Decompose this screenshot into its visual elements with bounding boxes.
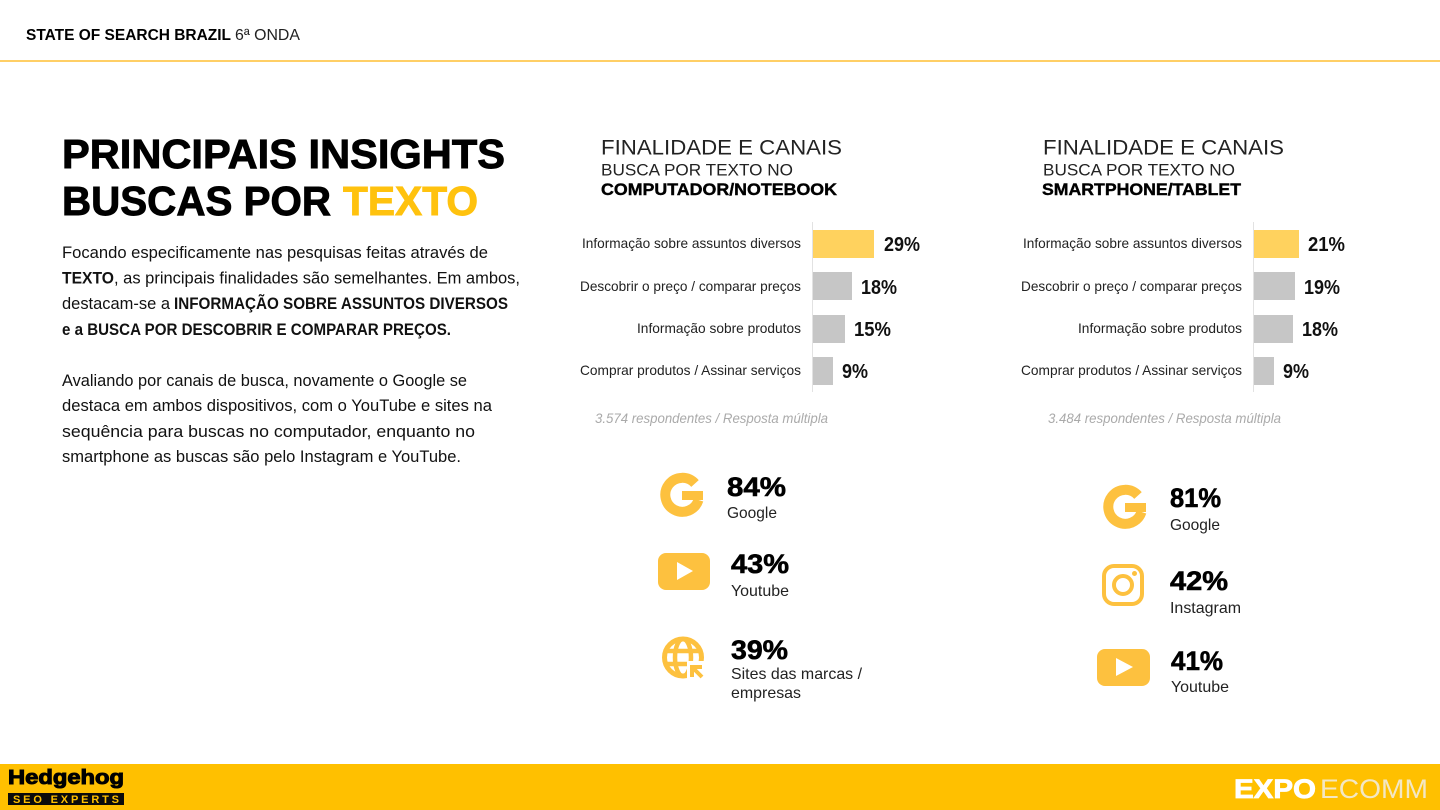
stat: instagram 42%	[1170, 566, 1241, 617]
title	[62, 131, 505, 224]
stat: google 81%: 81%	[1170, 483, 1221, 513]
header bar: STATE OF SEARCH BRAZIL	[26, 27, 231, 44]
title: PRINCIPAIS INSIGHTS	[62, 131, 505, 177]
bar chart: smartphone/tablet: Informação sobre produtos	[1078, 320, 1242, 336]
bar chart: smartphone/tablet: 19%	[1304, 277, 1340, 299]
text block: second paragraph: sequência para buscas no computador, enquanto no	[62, 423, 475, 441]
logo: hedgehog seo experts: SEO EXPERTS	[13, 794, 119, 806]
stat: youtube 41%: Youtube	[1171, 679, 1229, 696]
heading: computador/notebook: COMPUTADOR/NOTEBOOK	[601, 180, 838, 199]
heading: smartphone/tablet	[1042, 136, 1284, 199]
text block: first paragraph: destacam-se a	[62, 295, 171, 313]
respondents note: 3.484 respondentes / Resposta múltipla	[1048, 410, 1281, 426]
stat: youtube 41%: 41%	[1171, 646, 1223, 676]
bar chart: smartphone/tablet: Descobrir o preço / comparar preços	[1021, 278, 1242, 294]
stat: google 81%	[1170, 483, 1221, 534]
heading: computador/notebook: FINALIDADE E CANAIS	[601, 136, 842, 160]
bar chart: smartphone/tablet: 21%	[1308, 234, 1345, 256]
stat: sites 39%	[731, 635, 863, 702]
header bar: 6ª ONDA	[235, 27, 300, 44]
heading: smartphone/tablet: FINALIDADE E CANAIS	[1043, 136, 1284, 160]
stat: instagram 42%: 42%	[1170, 566, 1228, 596]
logo: hedgehog seo experts: Hedgehog	[8, 767, 124, 789]
bar chart: computador/notebook: Comprar produtos / Assinar serviços	[580, 362, 801, 378]
text block: second paragraph: Avaliando por canais de busca, novamente o Google se	[62, 372, 467, 390]
text block: first paragraph: INFORMAÇÃO SOBRE ASSUNTOS DIVERSOS	[174, 293, 508, 313]
bar chart: computador/notebook: 18%	[861, 277, 897, 299]
stat: sites 39%: Sites das marcas /	[731, 666, 863, 683]
icon: globe with cursor	[664, 639, 707, 681]
bar chart: smartphone/tablet: 18%	[1302, 319, 1338, 341]
stat: instagram 42%: Instagram	[1170, 600, 1241, 617]
bar chart: computador/notebook: 29%	[884, 234, 920, 256]
text block: first paragraph: TEXTO	[62, 270, 114, 288]
text block: second paragraph	[62, 372, 493, 466]
panel: computador/notebook	[580, 136, 920, 702]
bar chart: computador/notebook: Descobrir o preço / comparar preços	[580, 278, 801, 294]
footer band	[0, 764, 1440, 810]
title: BUSCAS POR	[62, 178, 331, 224]
stat: sites 39%: empresas	[731, 685, 801, 702]
bar chart: smartphone/tablet	[1021, 222, 1345, 392]
stat: google 84%: Google	[727, 505, 777, 522]
text block: first paragraph: e a BUSCA POR DESCOBRIR E COMPARAR PREÇOS.	[62, 321, 451, 339]
stat: google 84%	[727, 472, 786, 522]
bar chart: computador/notebook: Informação sobre assuntos diversos	[582, 235, 801, 251]
bar chart: computador/notebook: 15%	[854, 319, 891, 341]
heading: smartphone/tablet: BUSCA POR TEXTO NO	[1043, 160, 1235, 180]
text block: first paragraph: , as principais finalidades são semelhantes. Em ambos,	[114, 270, 520, 288]
stat: youtube 43%: 43%	[731, 549, 789, 579]
stat: sites 39%: 39%	[731, 635, 788, 665]
bar chart: smartphone/tablet: Informação sobre assuntos diversos	[1023, 235, 1242, 251]
bar chart: computador/notebook: Informação sobre produtos	[637, 320, 801, 336]
panel: smartphone/tablet	[1021, 136, 1345, 696]
heading: computador/notebook: BUSCA POR TEXTO NO	[601, 160, 793, 180]
icon: google	[665, 478, 703, 512]
stat: youtube 41%	[1171, 646, 1229, 696]
icon: youtube	[658, 553, 710, 590]
text block: second paragraph: destaca em ambos dispositivos, com o YouTube e sites na	[62, 397, 493, 415]
logo: expoecomm	[1234, 774, 1428, 804]
text block: second paragraph: smartphone as buscas são pelo Instagram e YouTube.	[62, 448, 461, 466]
icon: instagram	[1104, 566, 1142, 604]
logo: hedgehog seo experts	[8, 767, 124, 806]
respondents note: 3.574 respondentes / Resposta múltipla	[595, 410, 828, 426]
icon: google	[1108, 490, 1146, 524]
stat: youtube 43%	[731, 549, 789, 600]
icon: youtube	[1097, 649, 1150, 686]
bar chart: smartphone/tablet: 9%	[1283, 361, 1309, 383]
logo: expoecomm: EXPO	[1234, 774, 1316, 804]
title: TEXTO	[343, 178, 478, 224]
heading: computador/notebook	[601, 136, 842, 199]
header bar	[0, 27, 1440, 62]
text block: first paragraph: Focando especificamente nas pesquisas feitas através de	[62, 244, 488, 262]
text block: first paragraph	[62, 244, 520, 339]
stat: google 84%: 84%	[727, 472, 786, 502]
bar chart: computador/notebook: 9%	[842, 361, 868, 383]
bar chart: computador/notebook	[580, 222, 920, 392]
stat: youtube 43%: Youtube	[731, 583, 789, 600]
stat: google 81%: Google	[1170, 517, 1220, 534]
logo: expoecomm: ECOMM	[1320, 774, 1428, 804]
heading: smartphone/tablet: SMARTPHONE/TABLET	[1042, 180, 1242, 199]
bar chart: smartphone/tablet: Comprar produtos / Assinar serviços	[1021, 362, 1242, 378]
